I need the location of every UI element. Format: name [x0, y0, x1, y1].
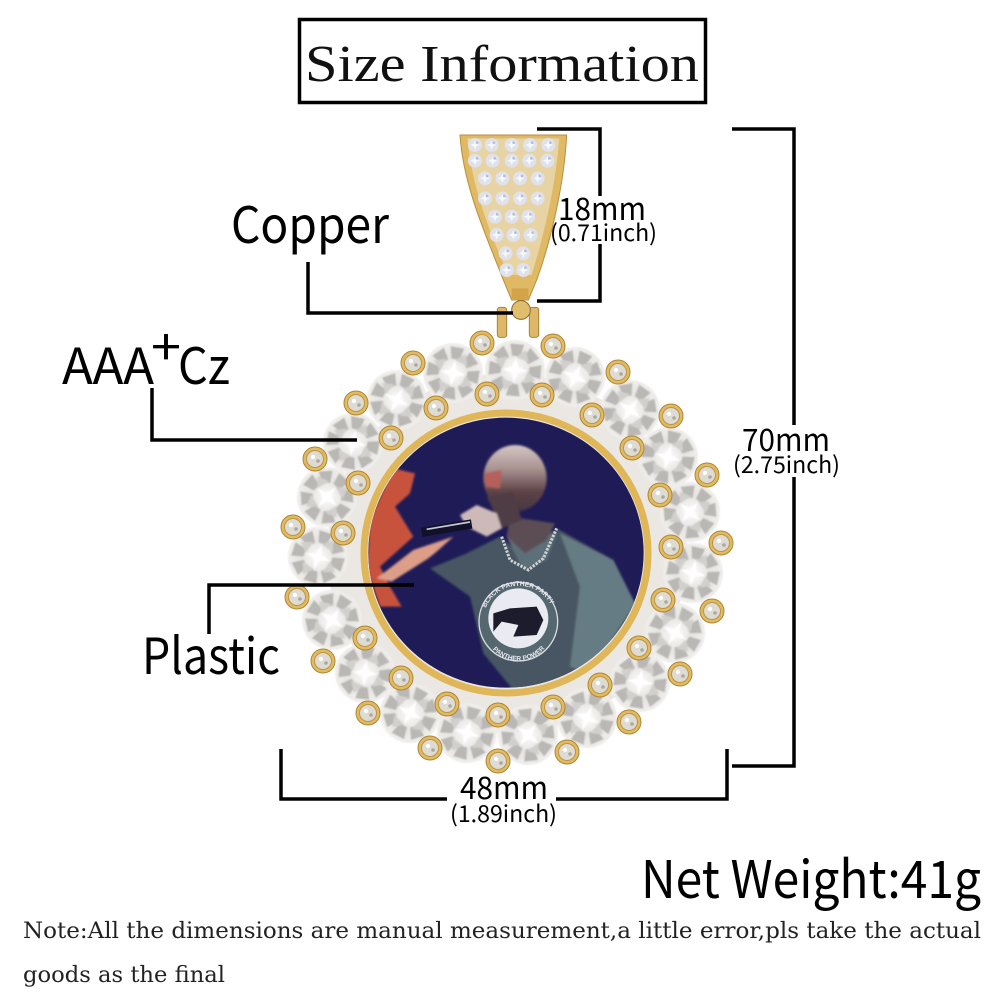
shirt logo lettering	[482, 581, 554, 660]
label: AAA+Cz: AAA	[62, 327, 155, 399]
label: AAA+Cz: +	[151, 308, 181, 380]
dimension: height 70mm: 70mm	[742, 415, 830, 460]
photo bezel	[364, 413, 648, 693]
leader line: cz	[152, 388, 357, 440]
shirt logo lettering: BLACK PANTHER PARTY	[482, 581, 554, 608]
photo of performer	[368, 418, 644, 688]
large cubic zirconia stones	[280, 337, 732, 777]
label: AAA+Cz: Cz	[178, 327, 230, 399]
pendant bail with pave stones	[460, 135, 567, 337]
net weight: Net Weight:41g	[641, 838, 981, 913]
note: Note:All the dimensions are manual measurement,a little error,pls take the actual	[23, 919, 981, 944]
label: Copper: Copper	[231, 186, 390, 258]
dimension: width 48mm: (1.89inch)	[450, 795, 557, 829]
title: Size Information	[305, 36, 699, 93]
small bezel stones	[281, 331, 733, 773]
title	[300, 20, 706, 102]
label: Copper	[231, 186, 513, 313]
dimension: bail 18mm	[537, 129, 657, 301]
label: AAA+Cz	[62, 308, 357, 440]
dimension: height 70mm	[732, 129, 840, 766]
dimension: height 70mm: (2.75inch)	[733, 446, 840, 480]
label: Plastic	[142, 585, 414, 689]
dimension: width 48mm: 48mm	[460, 763, 548, 808]
dimension: bail 18mm: 18mm	[558, 184, 646, 229]
medallion ring	[280, 330, 734, 774]
shirt logo lettering: PANTHER POWER	[493, 646, 545, 660]
label: Plastic: Plastic	[142, 617, 280, 689]
note: goods as the final	[23, 963, 225, 988]
leader line: copper	[308, 262, 513, 313]
dimension: width 48mm	[281, 749, 727, 829]
leader line: plastic	[209, 585, 414, 634]
note	[23, 919, 981, 988]
dimension: bail 18mm: (0.71inch)	[550, 214, 657, 248]
